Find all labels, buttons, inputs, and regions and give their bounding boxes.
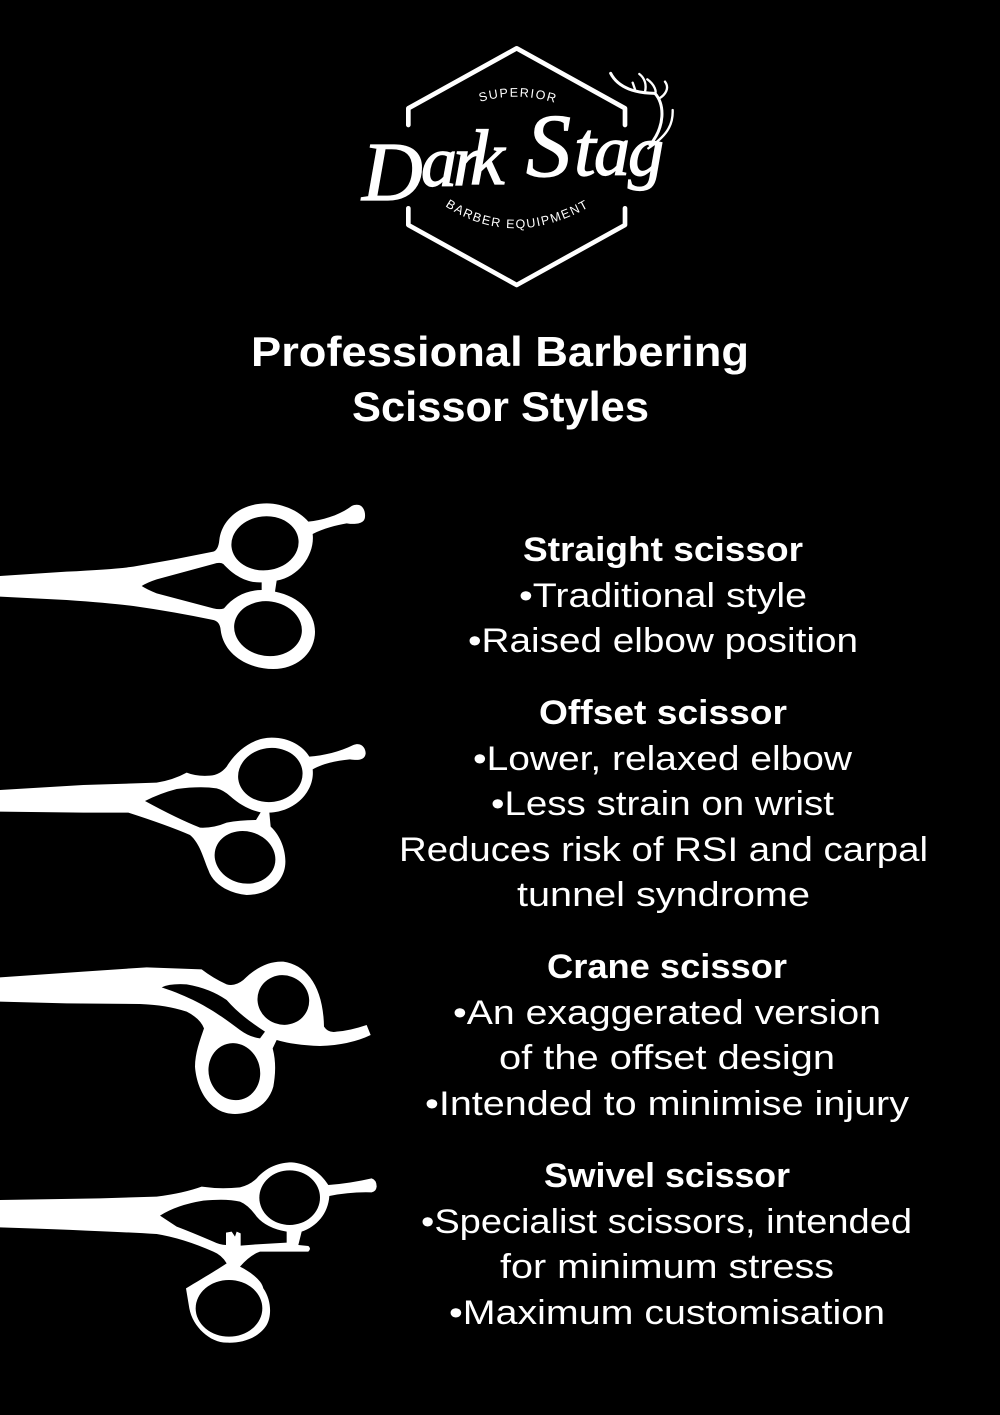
text block: offset scissor: •Lower, relaxed elbow [473,740,852,778]
text block: crane scissor: •An exaggerated version [453,994,881,1032]
icon: antler [611,73,673,148]
icon: swivel scissor [0,1162,377,1343]
logo text: barber equipment: BARBER EQUIPMENT [446,199,586,230]
text block: swivel scissor: •Maximum customisation [449,1294,885,1332]
title: Scissor Styles [352,383,649,430]
text block: crane scissor: of the offset design [499,1039,835,1077]
logo script: Stag: t [574,105,598,192]
logo script: Stag: a [594,111,630,191]
logo text: superior: SUPERIOR [479,88,556,102]
logo script: Stag: g [628,111,664,191]
text block: swivel scissor: Swivel scissor [544,1157,790,1195]
title [251,328,749,430]
text block: crane scissor: Crane scissor [547,948,787,986]
text block: swivel scissor: •Specialist scissors, intended [421,1203,912,1241]
text block: crane scissor [425,948,909,1123]
text block: offset scissor: Reduces risk of RSI and carpal [399,831,928,869]
text block: offset scissor [399,694,928,914]
logo script: Dark: r [453,121,482,201]
title: Professional Barbering [251,328,749,375]
logo script: Stag: S [526,97,571,196]
text block: straight scissor: •Traditional style [519,577,807,615]
logo script: Dark: a [421,122,457,202]
icon: crane scissor [0,962,371,1114]
text block: swivel scissor [421,1157,912,1332]
text block: straight scissor [468,531,858,660]
icon: offset scissor [0,738,366,895]
text block: crane scissor: •Intended to minimise injury [425,1085,909,1123]
logo script: Dark: k [470,114,506,201]
logo script: Dark: D [361,126,423,219]
text block: offset scissor: •Less strain on wrist [491,785,835,823]
logo: Dark Stag [360,46,674,288]
text block: swivel scissor: for minimum stress [500,1248,834,1286]
text block: offset scissor: Offset scissor [539,694,787,732]
text block: straight scissor: Straight scissor [523,531,803,569]
text block: offset scissor: tunnel syndrome [517,876,810,914]
icon: straight scissor [0,503,365,669]
text block: straight scissor: •Raised elbow position [468,622,858,660]
logo hexagon frame [408,48,625,285]
